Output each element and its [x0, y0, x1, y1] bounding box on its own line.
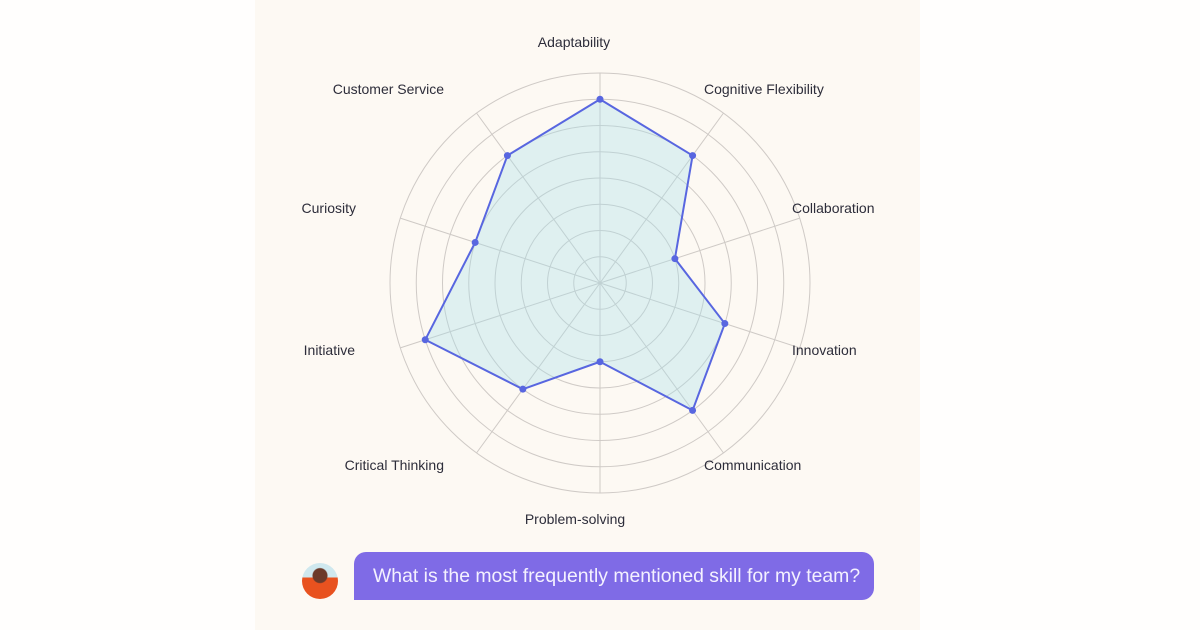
axis labels: Curiosity [302, 200, 356, 216]
axis labels: Critical Thinking [345, 457, 444, 473]
chat bubble question: What is the most frequently mentioned skill for my team? [373, 565, 860, 587]
axis labels [302, 34, 874, 527]
axis labels: Customer Service [333, 81, 444, 97]
axis labels: Initiative [304, 342, 355, 358]
axis labels: Communication [704, 457, 801, 473]
chat bubble question [354, 552, 874, 600]
axis labels: Adaptability [538, 34, 610, 50]
axis labels: Innovation [792, 342, 857, 358]
axis labels: Cognitive Flexibility [704, 81, 824, 97]
axis labels: Problem-solving [525, 511, 625, 527]
icon: user avatar [302, 563, 338, 599]
panel: background card [255, 0, 920, 630]
axis labels: Collaboration [792, 200, 874, 216]
data polygon [422, 96, 728, 414]
